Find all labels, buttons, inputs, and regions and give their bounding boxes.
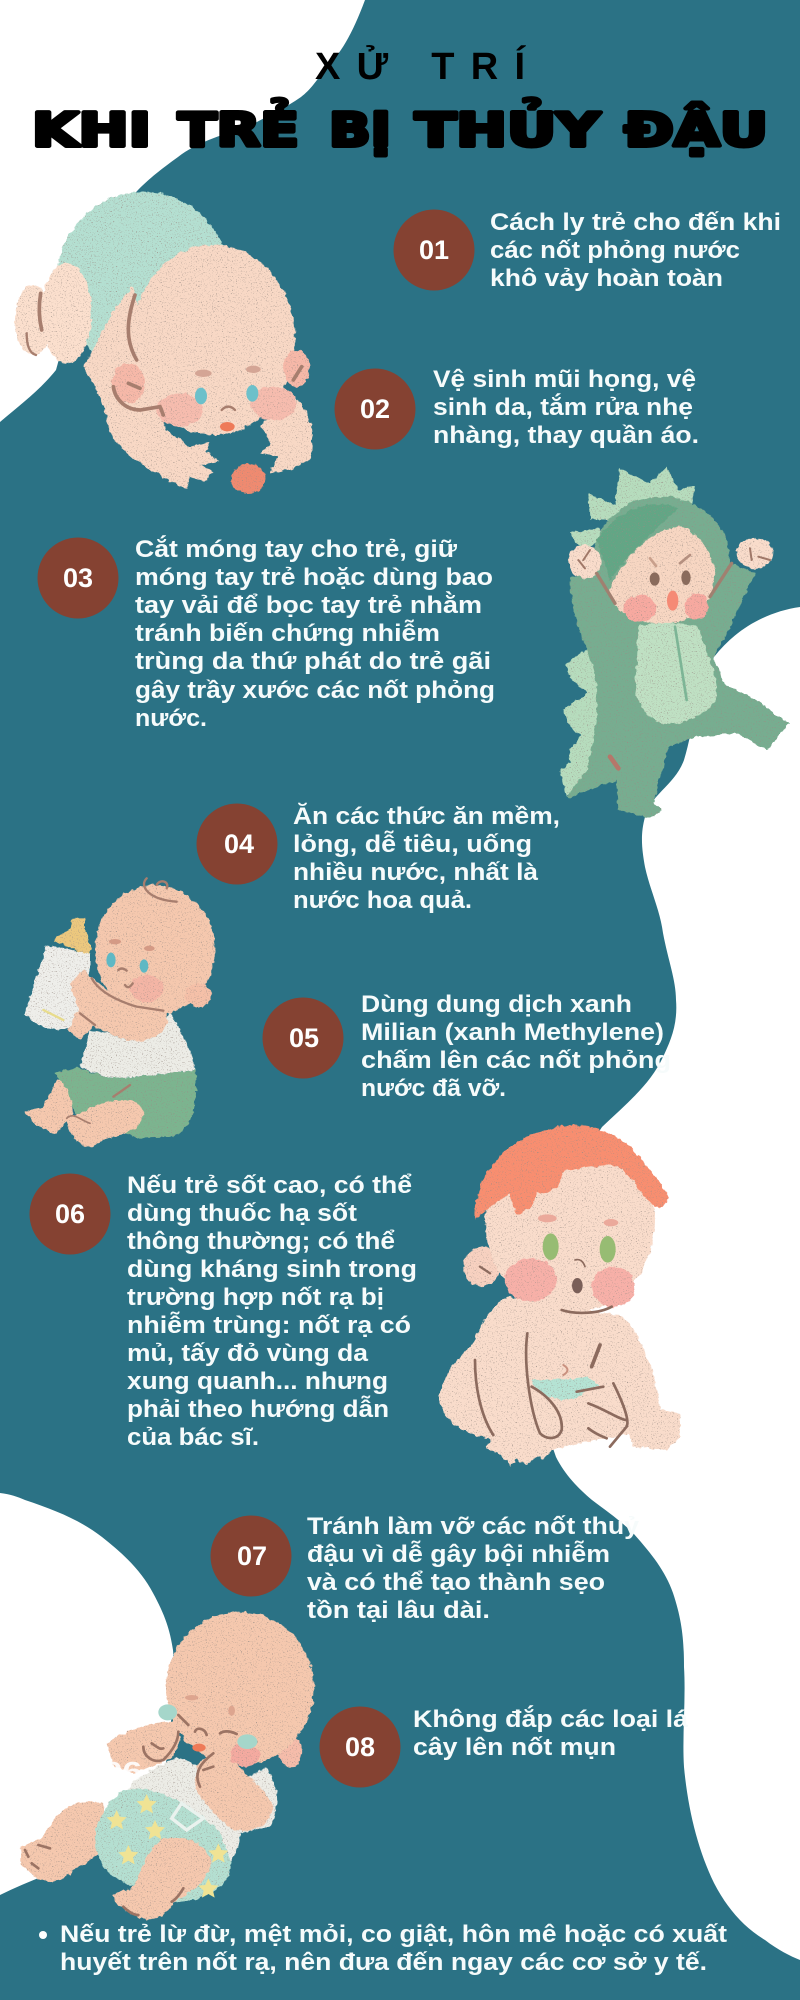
badge 06	[30, 1174, 110, 1254]
text 05: chấm lên các nốt phỏng	[361, 1047, 671, 1074]
bottom note	[39, 1921, 727, 1976]
text 04: nước hoa quả.	[293, 887, 472, 914]
white wave: top left	[0, 0, 365, 422]
text 08: Không đắp các loại lá	[413, 1705, 689, 1733]
badge 04: 04	[224, 829, 254, 859]
eyes	[543, 1233, 616, 1263]
badge 08	[320, 1706, 400, 1788]
title line 1: XỬ TRÍ	[315, 44, 526, 88]
badge 02	[334, 368, 416, 450]
diaper stars	[107, 1794, 228, 1898]
text 06: phải theo hướng dẫn	[127, 1395, 389, 1423]
text 06: trường hợp nốt rạ bị	[127, 1284, 384, 1311]
text 04: lỏng, dễ tiêu, uống	[293, 830, 532, 858]
text 05	[361, 991, 671, 1102]
bottom note: Nếu trẻ lừ đừ, mệt mỏi, co giật, hôn mê hoặc có xuất	[60, 1921, 727, 1948]
brows	[538, 1214, 618, 1226]
step 06	[30, 1172, 417, 1451]
text 06: dùng kháng sinh trong	[127, 1256, 417, 1283]
badge 01: 01	[419, 235, 449, 265]
badge 02: 02	[360, 394, 390, 424]
badge 01	[394, 210, 474, 290]
text 06: thông thường; có thể	[127, 1228, 395, 1255]
text 06: xung quanh... nhưng	[127, 1368, 388, 1395]
title line 2: THỦY	[415, 98, 601, 157]
title line 2: ĐẬU	[624, 103, 768, 157]
eyes	[650, 570, 691, 586]
limb lines	[475, 1260, 627, 1447]
badge 04	[196, 804, 278, 884]
badge 07: 07	[237, 1541, 267, 1571]
text 01: khô vảy hoàn toàn	[490, 265, 723, 292]
illustration: dinosaur costume baby	[560, 467, 790, 818]
title line 2	[32, 98, 768, 157]
illustration: crawling baby	[15, 192, 312, 494]
text 07	[307, 1513, 640, 1624]
badge 07	[210, 1516, 292, 1596]
badge 03: 03	[63, 563, 93, 593]
text 03: móng tay trẻ hoặc dùng bao	[135, 564, 493, 591]
face and hand lines	[25, 1715, 237, 1915]
text 06: mủ, tấy đỏ vùng da	[127, 1340, 369, 1367]
badge 08: 08	[345, 1732, 375, 1762]
step 08	[320, 1705, 689, 1788]
text 02	[433, 366, 699, 449]
body lines	[27, 293, 302, 415]
step 07	[210, 1513, 640, 1624]
text 04: Ăn các thức ăn mềm,	[293, 802, 560, 830]
badge 05: 05	[289, 1023, 319, 1053]
illustration: red-haired baby	[440, 1125, 680, 1467]
text 02: nhàng, thay quần áo.	[433, 422, 699, 449]
title line 2: TRẺ	[178, 98, 299, 157]
white wave: right side	[544, 607, 800, 1960]
eyes	[195, 385, 258, 404]
diaper tab	[172, 1803, 203, 1830]
badge 03	[38, 538, 118, 618]
step 01	[394, 209, 781, 292]
text 07: và có thể tạo thành sẹo	[307, 1569, 605, 1596]
step 04	[196, 802, 560, 914]
text 05: Dùng dung dịch xanh	[361, 991, 632, 1018]
brows	[195, 366, 261, 377]
text 03: gây trầy xước các nốt phỏng	[135, 677, 495, 704]
text 03: tay vải để bọc tay trẻ nhằm	[135, 591, 482, 619]
mouth	[220, 422, 235, 431]
illustration: crying baby	[20, 1612, 314, 1920]
text 03: trùng da thứ phát do trẻ gãi	[135, 648, 491, 675]
text 06: của bác sĩ.	[127, 1424, 259, 1451]
text 04: nhiều nước, nhất là	[293, 859, 539, 886]
text 06: nhiễm trùng: nốt rạ có	[127, 1311, 411, 1339]
text 01: các nốt phỏng nước	[490, 237, 740, 264]
hair and limb lines	[43, 878, 177, 1123]
text 03: nước.	[135, 705, 207, 732]
text 07: đậu vì dễ gây bội nhiễm	[307, 1540, 610, 1568]
text 01	[490, 209, 781, 292]
mouth	[667, 591, 678, 611]
text 08: cây lên nốt mụn	[413, 1734, 616, 1761]
badge 06: 06	[55, 1199, 85, 1229]
text 05: nước đã vỡ.	[361, 1075, 506, 1102]
text 06	[127, 1172, 417, 1451]
bottom note: huyết trên nốt rạ, nên đưa đến ngay các cơ sở y tế.	[60, 1949, 707, 1976]
mouth	[572, 1278, 583, 1293]
text 03: Cắt móng tay cho trẻ, giữ	[135, 535, 458, 563]
text 01: Cách ly trẻ cho đến khi	[490, 209, 781, 236]
title line 2: KHI	[32, 103, 151, 157]
text 03: tránh biến chứng nhiễm	[135, 619, 440, 647]
text 07: Tránh làm vỡ các nốt thuỷ	[307, 1513, 640, 1540]
illustration: baby with bottle	[25, 878, 215, 1148]
text 05: Milian (xanh Methylene)	[361, 1019, 664, 1046]
text 02: sinh da, tắm rửa nhẹ	[433, 393, 693, 421]
text 04	[293, 802, 560, 914]
step 05	[262, 991, 671, 1102]
costume and face lines	[578, 548, 770, 768]
title line 2: BỊ	[329, 103, 391, 157]
text 06: dùng thuốc hạ sốt	[127, 1200, 357, 1227]
text 03	[135, 535, 495, 732]
step 03	[38, 535, 495, 732]
toy ball	[231, 464, 265, 494]
text 08	[413, 1705, 689, 1761]
text 06: Nếu trẻ sốt cao, có thể	[127, 1172, 412, 1199]
white wave: bottom left	[0, 1493, 174, 1895]
brows	[109, 939, 155, 951]
marks and mouth	[185, 1695, 235, 1716]
text 07: tồn tại lâu dài.	[307, 1597, 490, 1624]
badge 05	[262, 998, 344, 1078]
eyes	[106, 953, 148, 973]
text 02: Vệ sinh mũi họng, vệ	[433, 366, 696, 393]
rattles	[158, 1704, 257, 1749]
step 02	[334, 366, 699, 450]
ghost number: 06	[103, 1756, 142, 1786]
title	[32, 44, 768, 157]
